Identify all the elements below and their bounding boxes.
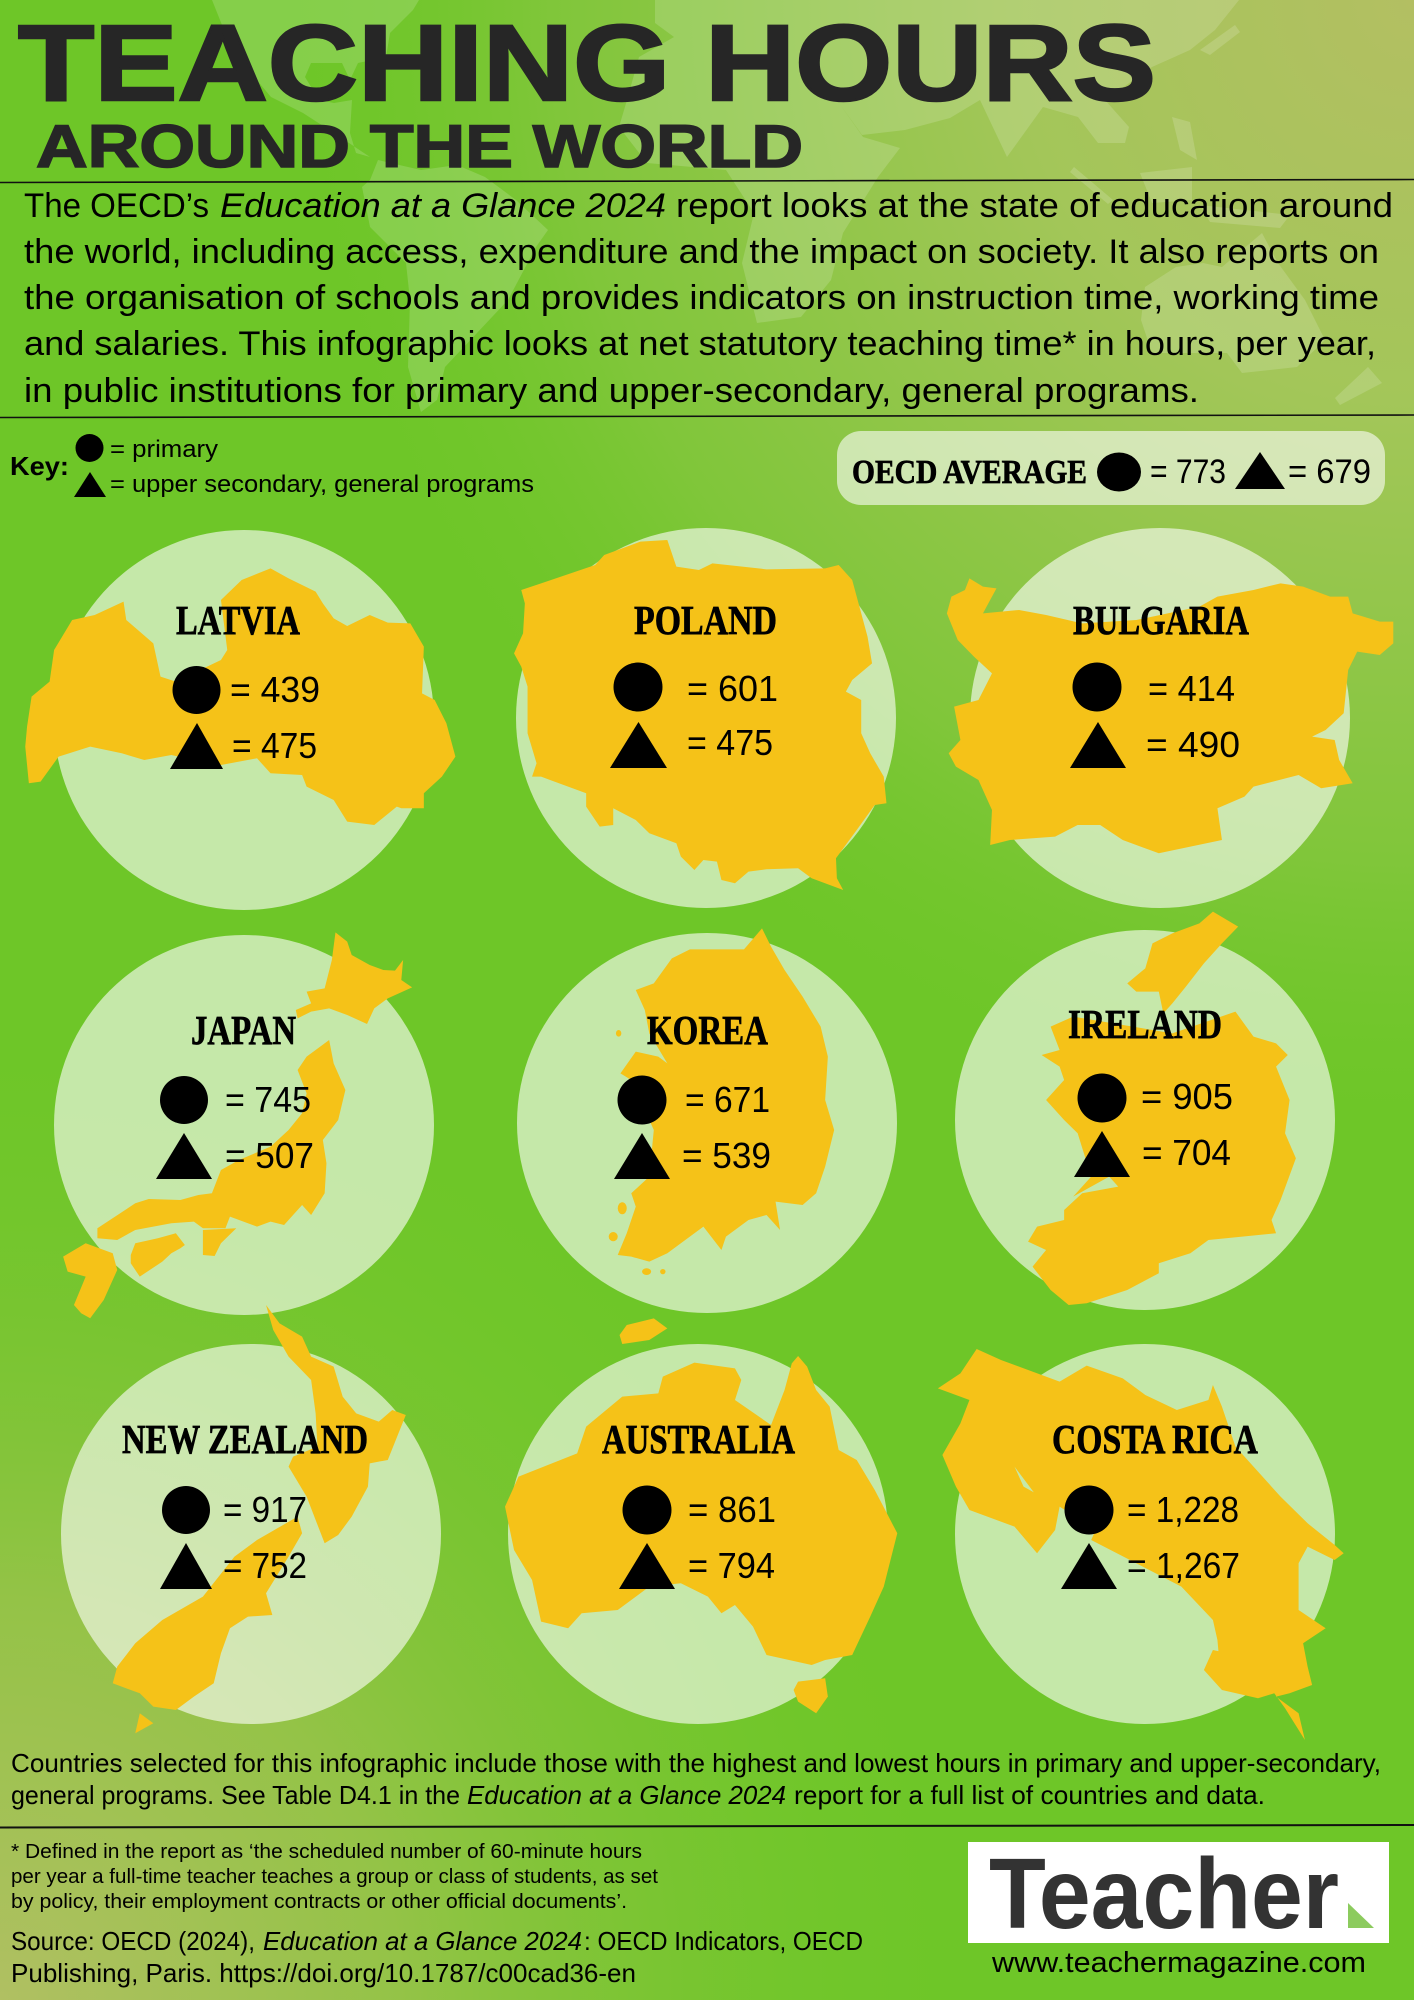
icon: primary circle xyxy=(76,434,104,462)
key: = upper secondary, general programs xyxy=(110,471,534,498)
intro paragraph: the organisation of schools and provides indicators on instruction time, working time xyxy=(24,279,1379,317)
intro paragraph: the world, including access, expenditure and the impact on society. It also reports on xyxy=(24,233,1379,271)
source citation xyxy=(11,1926,863,1988)
icon: upper secondary triangle xyxy=(74,472,106,497)
label: Latvia: LATVIA xyxy=(176,597,300,643)
primary hours xyxy=(1064,1486,1239,1534)
label: Japan: JAPAN xyxy=(191,1007,296,1053)
primary hours xyxy=(172,666,320,714)
website: www.teachermagazine.com xyxy=(991,1947,1366,1979)
upper secondary hours: = 704 xyxy=(1142,1132,1231,1173)
label: Korea: KOREA xyxy=(647,1007,768,1053)
map: Ireland xyxy=(1028,912,1296,1305)
footnote definition: by policy, their employment contracts or other official documents’. xyxy=(11,1890,627,1913)
title xyxy=(18,2,1156,180)
source citation: : OECD Indicators, OECD xyxy=(584,1926,863,1956)
key: Key: xyxy=(10,451,69,481)
source citation: Source: OECD (2024), xyxy=(11,1926,255,1956)
map: New Zealand xyxy=(113,1305,406,1733)
primary hours: = 601 xyxy=(687,668,778,709)
source citation: Publishing, Paris. https://doi.org/10.1787/c00cad36-en xyxy=(11,1958,636,1988)
label: Poland: POLAND xyxy=(634,597,777,643)
source citation: Education at a Glance 2024 xyxy=(263,1926,582,1956)
selection note xyxy=(11,1748,1381,1810)
footnote definition: per year a full-time teacher teaches a group or class of students, as set xyxy=(11,1865,658,1888)
primary hours xyxy=(622,1486,776,1534)
label: Ireland: IRELAND xyxy=(1068,1001,1222,1047)
primary hours: = 861 xyxy=(688,1489,776,1530)
upper secondary hours: = 794 xyxy=(688,1545,775,1586)
primary hours: = 1,228 xyxy=(1127,1489,1239,1530)
label: New Zealand: NEW ZEALAND xyxy=(122,1416,368,1462)
map: Poland xyxy=(514,540,886,890)
selection note: Countries selected for this infographic include those with the highest and lowest hours in primary and upper-secondary, xyxy=(11,1748,1381,1778)
intro paragraph: The OECD’s xyxy=(24,187,209,225)
label: Costa Rica: COSTA RICA xyxy=(1052,1416,1258,1462)
primary hours xyxy=(160,1076,311,1124)
primary hours xyxy=(1072,662,1235,712)
footnote definition xyxy=(11,1840,658,1913)
panel: Latvia xyxy=(25,530,455,910)
background world map xyxy=(212,0,1382,412)
footnote definition: * Defined in the report as ‘the scheduled number of 60-minute hours xyxy=(11,1840,642,1863)
primary hours: = 671 xyxy=(685,1079,770,1120)
panel: Korea xyxy=(517,928,897,1313)
intro paragraph: in public institutions for primary and upper-secondary, general programs. xyxy=(24,372,1199,410)
upper secondary hours xyxy=(610,722,773,768)
panel: Costa Rica xyxy=(938,1344,1344,1740)
panel: Australia xyxy=(505,1318,897,1724)
map: Costa Rica xyxy=(938,1349,1344,1740)
upper secondary hours xyxy=(1061,1543,1240,1589)
upper secondary hours xyxy=(1074,1131,1231,1177)
primary hours: = 439 xyxy=(230,669,320,710)
upper secondary hours xyxy=(170,723,317,769)
label: Bulgaria: BULGARIA xyxy=(1073,597,1249,643)
OECD average callout: = 773 xyxy=(1150,453,1226,491)
title line 2: AROUND THE WORLD xyxy=(36,113,803,180)
map: Latvia xyxy=(25,568,455,825)
primary hours xyxy=(614,662,778,712)
label: Australia: AUSTRALIA xyxy=(602,1416,795,1462)
upper secondary hours: = 490 xyxy=(1146,724,1240,765)
upper secondary hours xyxy=(619,1543,775,1589)
upper secondary hours: = 539 xyxy=(682,1135,771,1176)
selection note: report for a full list of countries and data. xyxy=(794,1780,1265,1810)
map: Japan xyxy=(63,932,412,1318)
intro paragraph xyxy=(24,187,1393,410)
intro paragraph: Education at a Glance 2024 xyxy=(220,187,666,225)
intro paragraph: report looks at the state of education around xyxy=(676,187,1393,225)
primary hours xyxy=(162,1486,307,1534)
OECD average callout: OECD AVERAGE xyxy=(852,454,1087,491)
panel: New Zealand xyxy=(61,1305,441,1733)
upper secondary hours: = 1,267 xyxy=(1127,1545,1240,1586)
upper secondary hours xyxy=(614,1133,771,1179)
upper secondary hours: = 752 xyxy=(223,1545,307,1586)
key xyxy=(10,434,534,498)
map: Australia xyxy=(505,1318,897,1713)
title line 1: TEACHING HOURS xyxy=(18,2,1156,123)
Teacher logo: Teacher xyxy=(989,1838,1339,1950)
primary hours xyxy=(1078,1074,1233,1122)
key: = primary xyxy=(110,436,218,463)
OECD average callout: = 679 xyxy=(1288,453,1371,491)
upper secondary hours xyxy=(1070,722,1240,768)
panel: Bulgaria xyxy=(947,528,1393,908)
map: Bulgaria xyxy=(947,578,1393,853)
primary hours xyxy=(618,1076,770,1124)
primary hours: = 905 xyxy=(1141,1076,1233,1117)
primary hours: = 917 xyxy=(223,1489,307,1530)
primary hours: = 745 xyxy=(225,1079,311,1120)
panel: Poland xyxy=(514,528,896,908)
panel: Ireland xyxy=(955,912,1335,1310)
map: Korea xyxy=(609,928,834,1275)
panel: Japan xyxy=(54,932,434,1318)
upper secondary hours xyxy=(160,1543,307,1589)
OECD average callout xyxy=(837,431,1385,505)
upper secondary hours: = 475 xyxy=(687,722,773,763)
intro paragraph: and salaries. This infographic looks at net statutory teaching time* in hours, per year, xyxy=(24,325,1376,363)
upper secondary hours: = 507 xyxy=(225,1135,314,1176)
upper secondary hours: = 475 xyxy=(232,725,317,766)
primary hours: = 414 xyxy=(1148,668,1235,709)
selection note: general programs. See Table D4.1 in the xyxy=(11,1780,460,1810)
selection note: Education at a Glance 2024 xyxy=(467,1780,786,1810)
upper secondary hours xyxy=(156,1133,314,1179)
